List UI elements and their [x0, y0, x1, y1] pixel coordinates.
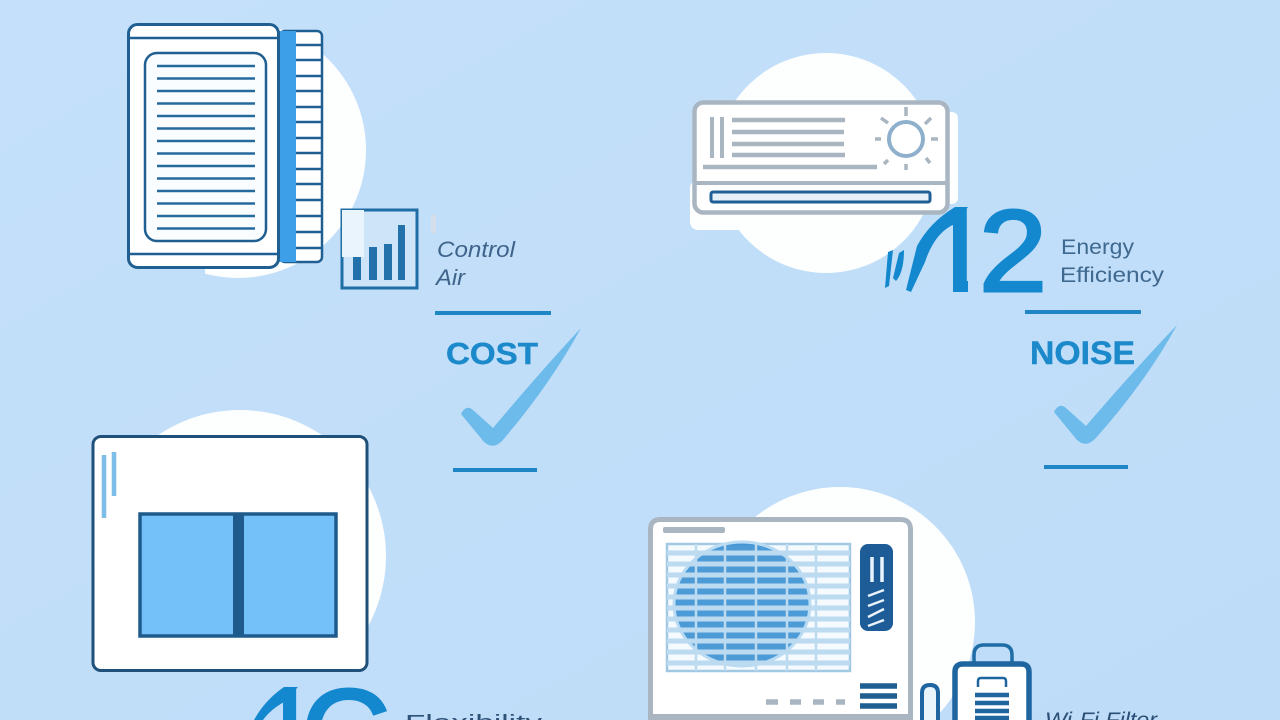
icon: split air conditioner	[694, 102, 948, 212]
fan grille	[667, 542, 850, 671]
label: energy efficiency: Energy	[1061, 236, 1135, 259]
control panel	[860, 544, 893, 631]
icon: window frame	[93, 436, 367, 670]
panel: cost check	[435, 311, 581, 472]
icon: check mark	[461, 328, 581, 446]
panel: window unit	[93, 410, 542, 720]
label: energy efficiency: Efficiency	[1060, 264, 1165, 287]
label: energy efficiency	[1060, 236, 1165, 287]
white backdrop circle	[755, 487, 975, 720]
stat: 1C	[254, 687, 387, 720]
icon: check mark	[1054, 325, 1177, 444]
label: control air	[434, 237, 516, 290]
stat: 12: 2	[979, 186, 1047, 316]
heading: noise: NOISE	[1030, 335, 1135, 371]
icon: filter body	[128, 24, 278, 268]
stat: 12	[885, 207, 1042, 292]
panel: air filter unit	[110, 22, 516, 290]
icon: bar chart	[342, 210, 436, 288]
label: control air: Air	[434, 265, 467, 290]
white backdrop circle	[205, 28, 366, 278]
icon: side vent	[279, 31, 322, 262]
panel: noise check	[1025, 310, 1177, 469]
heading: cost: COST	[446, 336, 538, 371]
label: control air: Control	[437, 237, 516, 262]
icon: outdoor condenser	[650, 520, 912, 720]
stat: 12: 1	[924, 184, 991, 318]
panel: outdoor unit	[650, 487, 1158, 720]
panel: wall air conditioner	[690, 53, 1165, 318]
icon: clipboard case	[922, 645, 1029, 720]
white backdrop circle	[158, 410, 386, 625]
white backdrop	[690, 53, 958, 273]
